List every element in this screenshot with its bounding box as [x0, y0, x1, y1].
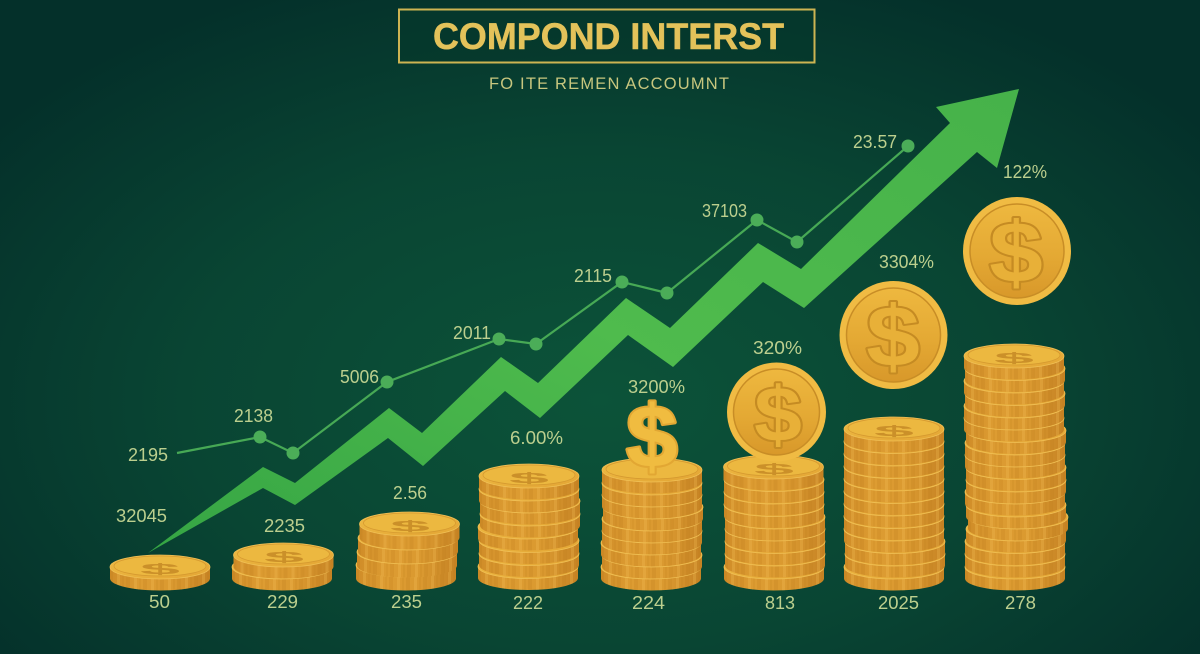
coin stack 1	[110, 555, 210, 590]
line chart labels: 37103	[702, 201, 747, 221]
stack bottom labels: 50	[149, 592, 170, 612]
stack bottom labels: 224	[632, 593, 665, 613]
coin stack 2	[232, 543, 334, 590]
title box	[399, 10, 814, 62]
floating coin 1: $	[754, 372, 802, 458]
floating coin 3	[963, 197, 1071, 305]
floating coin 2	[840, 281, 948, 389]
coin stack 8	[964, 344, 1068, 590]
stack bottom labels: 2025	[878, 593, 919, 613]
coin stack 6	[724, 455, 825, 590]
stack top labels: 3304%	[879, 252, 934, 272]
coin stack 4: $	[509, 470, 549, 486]
coin stack 8: $	[994, 350, 1034, 366]
stack bottom labels: 813	[765, 593, 795, 613]
title box: COMPOND INTERST	[433, 15, 784, 57]
coin stack 3	[356, 512, 460, 590]
coin stack 6: $	[754, 461, 794, 477]
stack top labels: 320%	[753, 338, 802, 358]
coin stack 7	[844, 417, 945, 590]
growth arrow	[148, 89, 1019, 553]
stack bottom labels: 222	[513, 593, 543, 613]
coin stack 5 with dollar sign	[601, 388, 703, 590]
stack bottom labels: 229	[267, 592, 298, 612]
coin stack 5 with dollar sign: $	[626, 388, 678, 487]
coin stack 4	[478, 464, 580, 590]
subtitle: FO ITE REMEN ACCOUMNT	[489, 75, 729, 93]
line chart labels	[128, 132, 897, 465]
line chart labels: 23.57	[853, 132, 897, 152]
stack top labels: 122%	[1003, 162, 1047, 182]
stack top labels	[116, 162, 1047, 536]
stack bottom labels	[149, 592, 1036, 613]
floating coin 3: $	[989, 205, 1043, 301]
line chart labels: 2195	[128, 445, 168, 465]
floating coin 2: $	[866, 289, 920, 385]
stack bottom labels: 235	[391, 592, 422, 612]
line chart with markers	[177, 140, 914, 460]
coin stack 7: $	[874, 423, 914, 439]
stack bottom labels: 278	[1005, 593, 1036, 613]
stack top labels: 3200%	[628, 377, 685, 397]
line chart labels: 2138	[234, 406, 273, 426]
stack top labels: 2235	[264, 516, 305, 536]
stack top labels: 2.56	[393, 483, 427, 503]
floating coin 1	[727, 362, 826, 462]
coin stack 1: $	[140, 561, 180, 577]
line chart labels: 2011	[453, 323, 491, 343]
stack top labels: 32045	[116, 506, 167, 526]
line chart labels: 2115	[574, 266, 612, 286]
coin stack 2: $	[264, 549, 304, 565]
stack top labels: 6.00%	[510, 428, 563, 448]
line chart labels: 5006	[340, 367, 379, 387]
coin stack 3: $	[390, 518, 430, 534]
